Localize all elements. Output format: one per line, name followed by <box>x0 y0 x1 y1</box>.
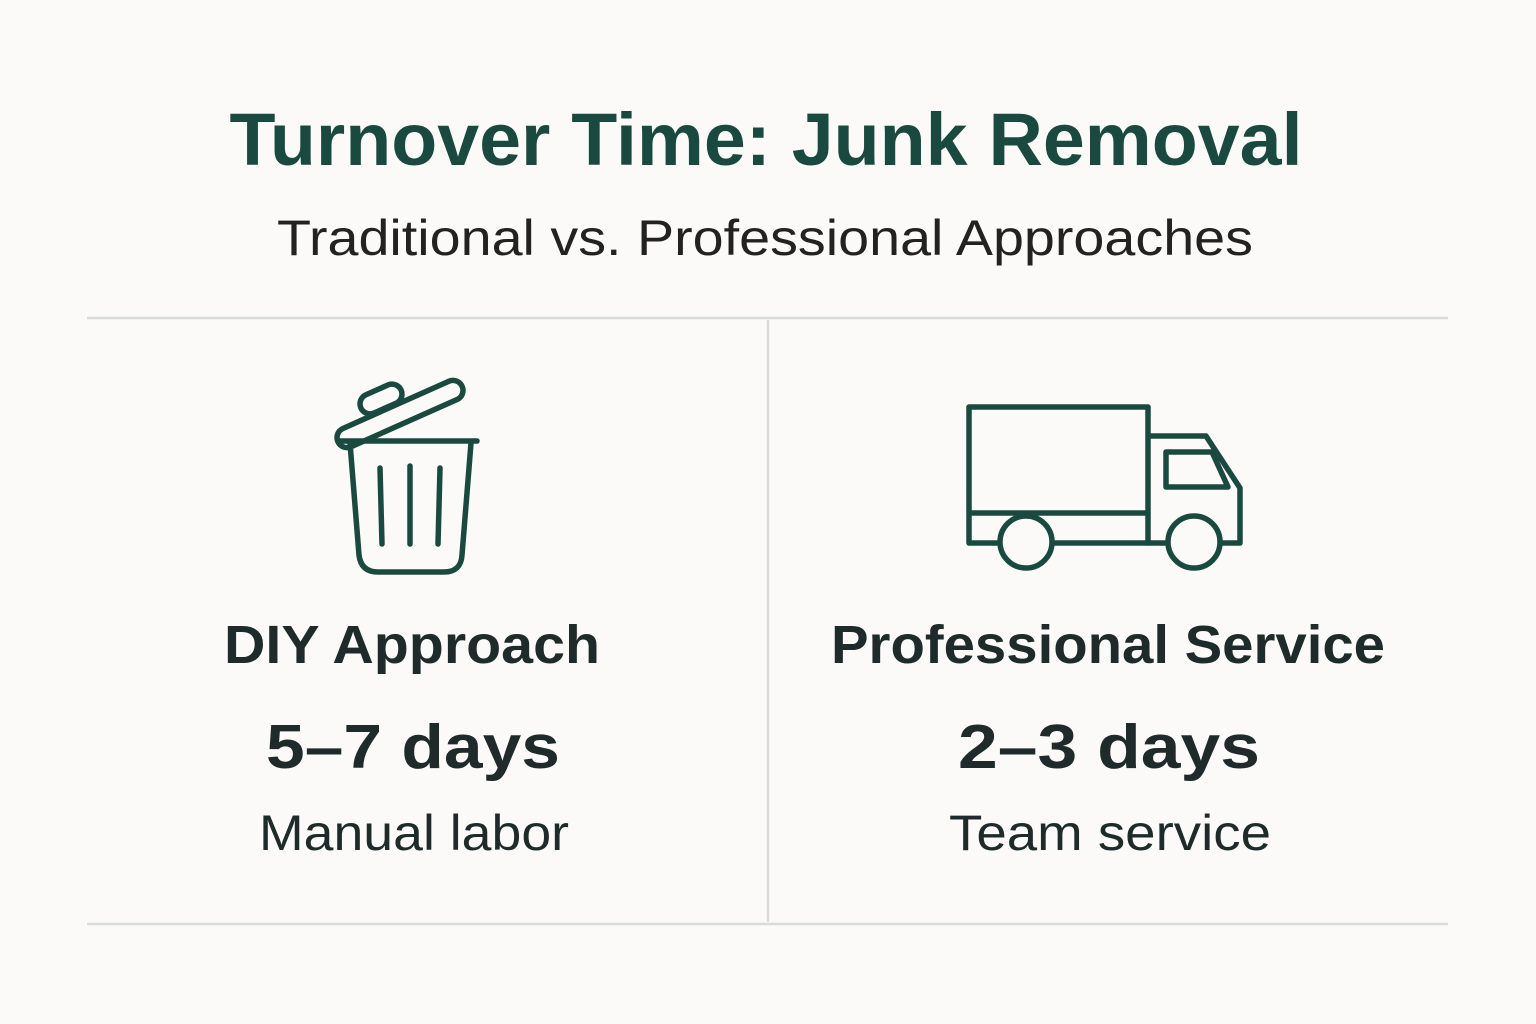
panel: DIY <box>224 377 600 861</box>
value: 2-3 days: 2–3 days <box>958 713 1260 782</box>
icon: trash can <box>334 377 477 572</box>
subtitle: Traditional vs. Professional Approaches <box>277 210 1253 266</box>
title: Turnover Time: Junk Removal <box>230 98 1302 181</box>
panel: Professional <box>831 407 1385 861</box>
heading: Professional Service: Professional Service <box>831 615 1385 675</box>
label: Team service: Team service <box>949 805 1271 861</box>
label: Manual labor: Manual labor <box>259 805 569 861</box>
heading: DIY Approach: DIY Approach <box>224 615 600 675</box>
icon: truck <box>969 407 1240 568</box>
value: 5-7 days: 5–7 days <box>266 713 560 782</box>
